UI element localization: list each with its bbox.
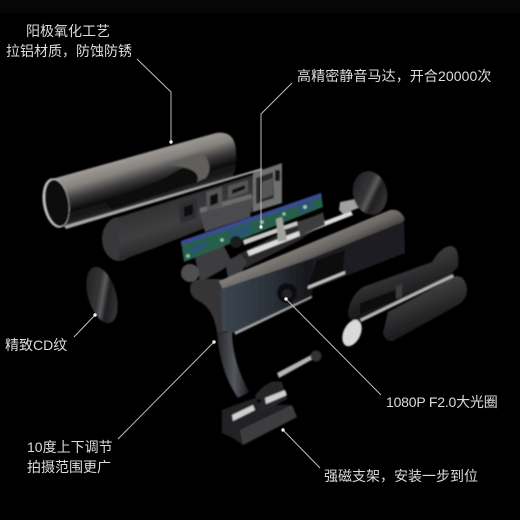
screw [277, 350, 322, 378]
side cover [383, 276, 467, 341]
label: tilt adjustment [27, 439, 113, 475]
camera face [221, 258, 315, 333]
label: silent motor: 高精密静音马达，开合20000次 [297, 68, 492, 84]
side barrel [348, 246, 458, 320]
circuit board [181, 193, 323, 262]
top band [219, 210, 405, 292]
white disc [338, 317, 366, 349]
rear housing [102, 163, 282, 261]
magnetic bracket [222, 381, 297, 445]
line: anodized tube [137, 59, 171, 142]
line: cd disc [74, 315, 95, 337]
line: lens [286, 299, 381, 395]
label: anodized aluminium: 拉铝材质，防蚀防锈 [6, 43, 132, 59]
label: cd texture: 精致CD纹 [5, 337, 67, 353]
label: tilt adjustment: 10度上下调节 [27, 439, 113, 455]
front housing [190, 210, 405, 335]
label: aperture: 1080P F2.0大光圈 [386, 394, 498, 410]
cd disc left [81, 263, 123, 327]
left flange [190, 279, 226, 333]
aluminium tube [39, 133, 262, 230]
motor assembly [181, 198, 361, 282]
leader dots [93, 140, 288, 432]
leader lines [74, 59, 381, 468]
label: magnetic mount: 强磁支架，安装一步到位 [324, 468, 478, 484]
exploded product illustration [39, 133, 467, 445]
right panel [310, 222, 405, 290]
top strip [0, 0, 520, 13]
line: bracket [283, 430, 320, 468]
label: anodized aluminium: 阳极氧化工艺 [26, 23, 110, 39]
adjustment arm [217, 332, 249, 398]
label: tilt adjustment: 拍摄范围更广 [27, 459, 111, 475]
line: arm [118, 342, 214, 439]
line: motor [261, 83, 292, 227]
label: anodized aluminium [6, 23, 132, 59]
cd texture end cap right [349, 168, 391, 218]
